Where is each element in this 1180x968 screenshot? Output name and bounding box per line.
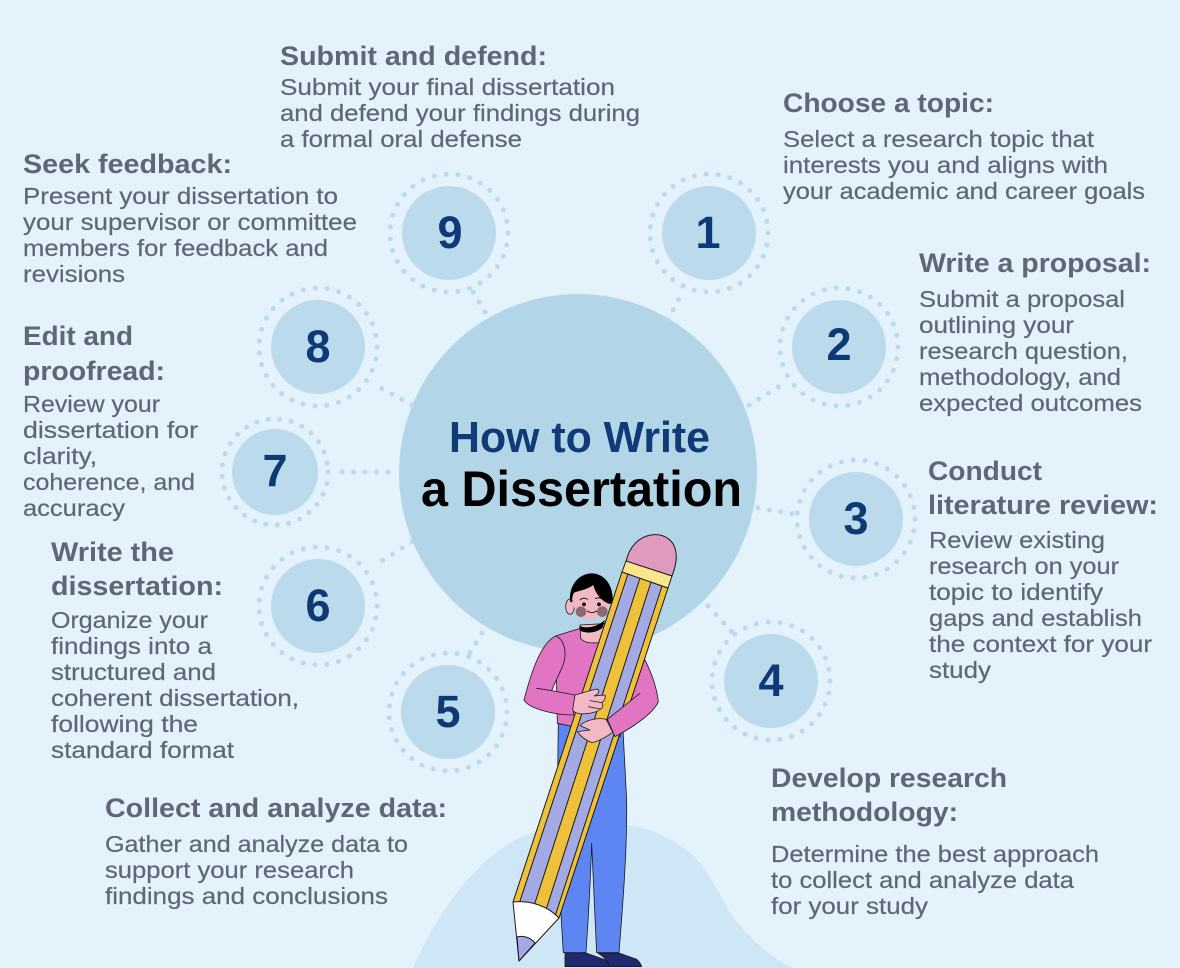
text: submit and defend: and defend your findings during	[280, 100, 640, 126]
text: edit and proofread: dissertation for	[23, 417, 198, 443]
text: write a proposal: expected outcomes	[919, 390, 1142, 416]
step 8 badge	[259, 288, 377, 406]
text: choose a topic: Choose a topic:	[783, 88, 994, 118]
text: collect and analyze data: Collect and analyze data:	[105, 793, 447, 823]
step 7 badge	[222, 419, 328, 525]
hands and forearm over pencil	[573, 689, 658, 743]
text: develop research methodology	[771, 763, 1099, 919]
pencil	[513, 535, 676, 961]
text: conduct literature review: Review existing	[929, 527, 1105, 553]
text: write the dissertation: findings into a	[51, 633, 213, 659]
text: conduct literature review: the context for your	[929, 631, 1152, 657]
step 9 badge: 9	[437, 207, 463, 258]
text: choose a topic: Select a research topic that	[783, 126, 1095, 152]
text: conduct literature review	[928, 456, 1158, 683]
text: develop research methodology: Develop research	[771, 763, 1007, 793]
text: collect and analyze data: support your research	[105, 857, 354, 883]
text: edit and proofread	[23, 321, 198, 521]
step 1 badge	[650, 174, 768, 292]
near arm	[524, 636, 575, 715]
connector dots	[342, 290, 800, 656]
step 7 badge: 7	[262, 445, 288, 496]
title: a Dissertation	[421, 461, 742, 517]
text: write the dissertation: coherent dissertation,	[51, 685, 299, 711]
step 3 badge	[797, 460, 915, 578]
background hill	[413, 824, 793, 968]
step 9 badge	[390, 174, 508, 292]
text: seek feedback	[23, 149, 357, 287]
text: seek feedback: Present your dissertation to	[23, 183, 338, 209]
text: write the dissertation	[51, 537, 299, 763]
text: develop research methodology: methodology:	[771, 797, 958, 827]
text: write a proposal: Write a proposal:	[919, 248, 1151, 278]
text: collect and analyze data: Gather and analyze data to	[105, 831, 408, 857]
text: submit and defend: a formal oral defense	[280, 126, 522, 152]
text: develop research methodology: to collect and analyze data	[771, 867, 1075, 893]
text: edit and proofread: accuracy	[23, 495, 125, 521]
step 1 badge: 1	[695, 207, 721, 258]
title	[421, 413, 742, 517]
text: seek feedback: members for feedback and	[23, 235, 328, 261]
text: collect and analyze data	[105, 793, 447, 909]
step 4 badge: 4	[758, 655, 784, 706]
text: write a proposal: outlining your	[919, 312, 1074, 338]
text: seek feedback: revisions	[23, 261, 125, 287]
neck	[580, 623, 610, 643]
text: choose a topic: your academic and career goals	[783, 178, 1145, 204]
text: write the dissertation: standard format	[51, 737, 235, 763]
text: collect and analyze data: findings and conclusions	[105, 883, 388, 909]
step 8 badge: 8	[305, 321, 331, 372]
text: conduct literature review: study	[929, 657, 991, 683]
text: write a proposal: methodology, and	[919, 364, 1121, 390]
text: edit and proofread: Edit and	[23, 321, 133, 351]
text: write a proposal: Submit a proposal	[919, 286, 1125, 312]
text: write the dissertation: following the	[51, 711, 198, 737]
text: seek feedback: Seek feedback:	[23, 149, 232, 179]
text: choose a topic: interests you and aligns with	[783, 152, 1108, 178]
trousers and shoes	[557, 723, 642, 967]
step 2 badge: 2	[826, 319, 852, 370]
torso and far arm	[556, 628, 633, 737]
text: write the dissertation: Organize your	[51, 607, 208, 633]
step 6 badge	[259, 547, 377, 665]
head	[566, 599, 574, 614]
text: write the dissertation: structured and	[51, 659, 216, 685]
step 2 badge	[780, 288, 898, 406]
text: edit and proofread: Review your	[23, 391, 160, 417]
text: develop research methodology: Determine the best approach	[771, 841, 1099, 867]
text: edit and proofread: proofread:	[23, 356, 165, 386]
text: write the dissertation: dissertation:	[51, 571, 223, 601]
step 5 badge: 5	[435, 686, 461, 737]
text: develop research methodology: for your study	[771, 893, 928, 919]
text: edit and proofread: clarity,	[23, 443, 97, 469]
step 5 badge	[389, 653, 507, 771]
text: write a proposal: research question,	[919, 338, 1128, 364]
text: conduct literature review: gaps and establish	[929, 605, 1142, 631]
text: seek feedback: your supervisor or committee	[23, 209, 357, 235]
text: submit and defend	[280, 41, 640, 152]
text: write the dissertation: Write the	[51, 537, 174, 567]
text: edit and proofread: coherence, and	[23, 469, 195, 495]
text: conduct literature review: topic to identify	[929, 579, 1103, 605]
text: write a proposal	[919, 248, 1151, 416]
text: conduct literature review: Conduct	[928, 456, 1042, 486]
title: How to Write	[449, 413, 710, 462]
text: submit and defend: Submit your final dissertation	[280, 74, 615, 100]
text: conduct literature review: research on your	[929, 553, 1119, 579]
step 3 badge: 3	[843, 493, 869, 544]
illustration: person holding giant pencil	[513, 535, 676, 967]
step 6 badge: 6	[305, 580, 331, 631]
text: submit and defend: Submit and defend:	[280, 41, 547, 71]
central circle	[399, 294, 757, 652]
step 4 badge	[712, 622, 830, 740]
text: conduct literature review: literature review:	[928, 490, 1158, 520]
text: choose a topic	[783, 88, 1145, 204]
